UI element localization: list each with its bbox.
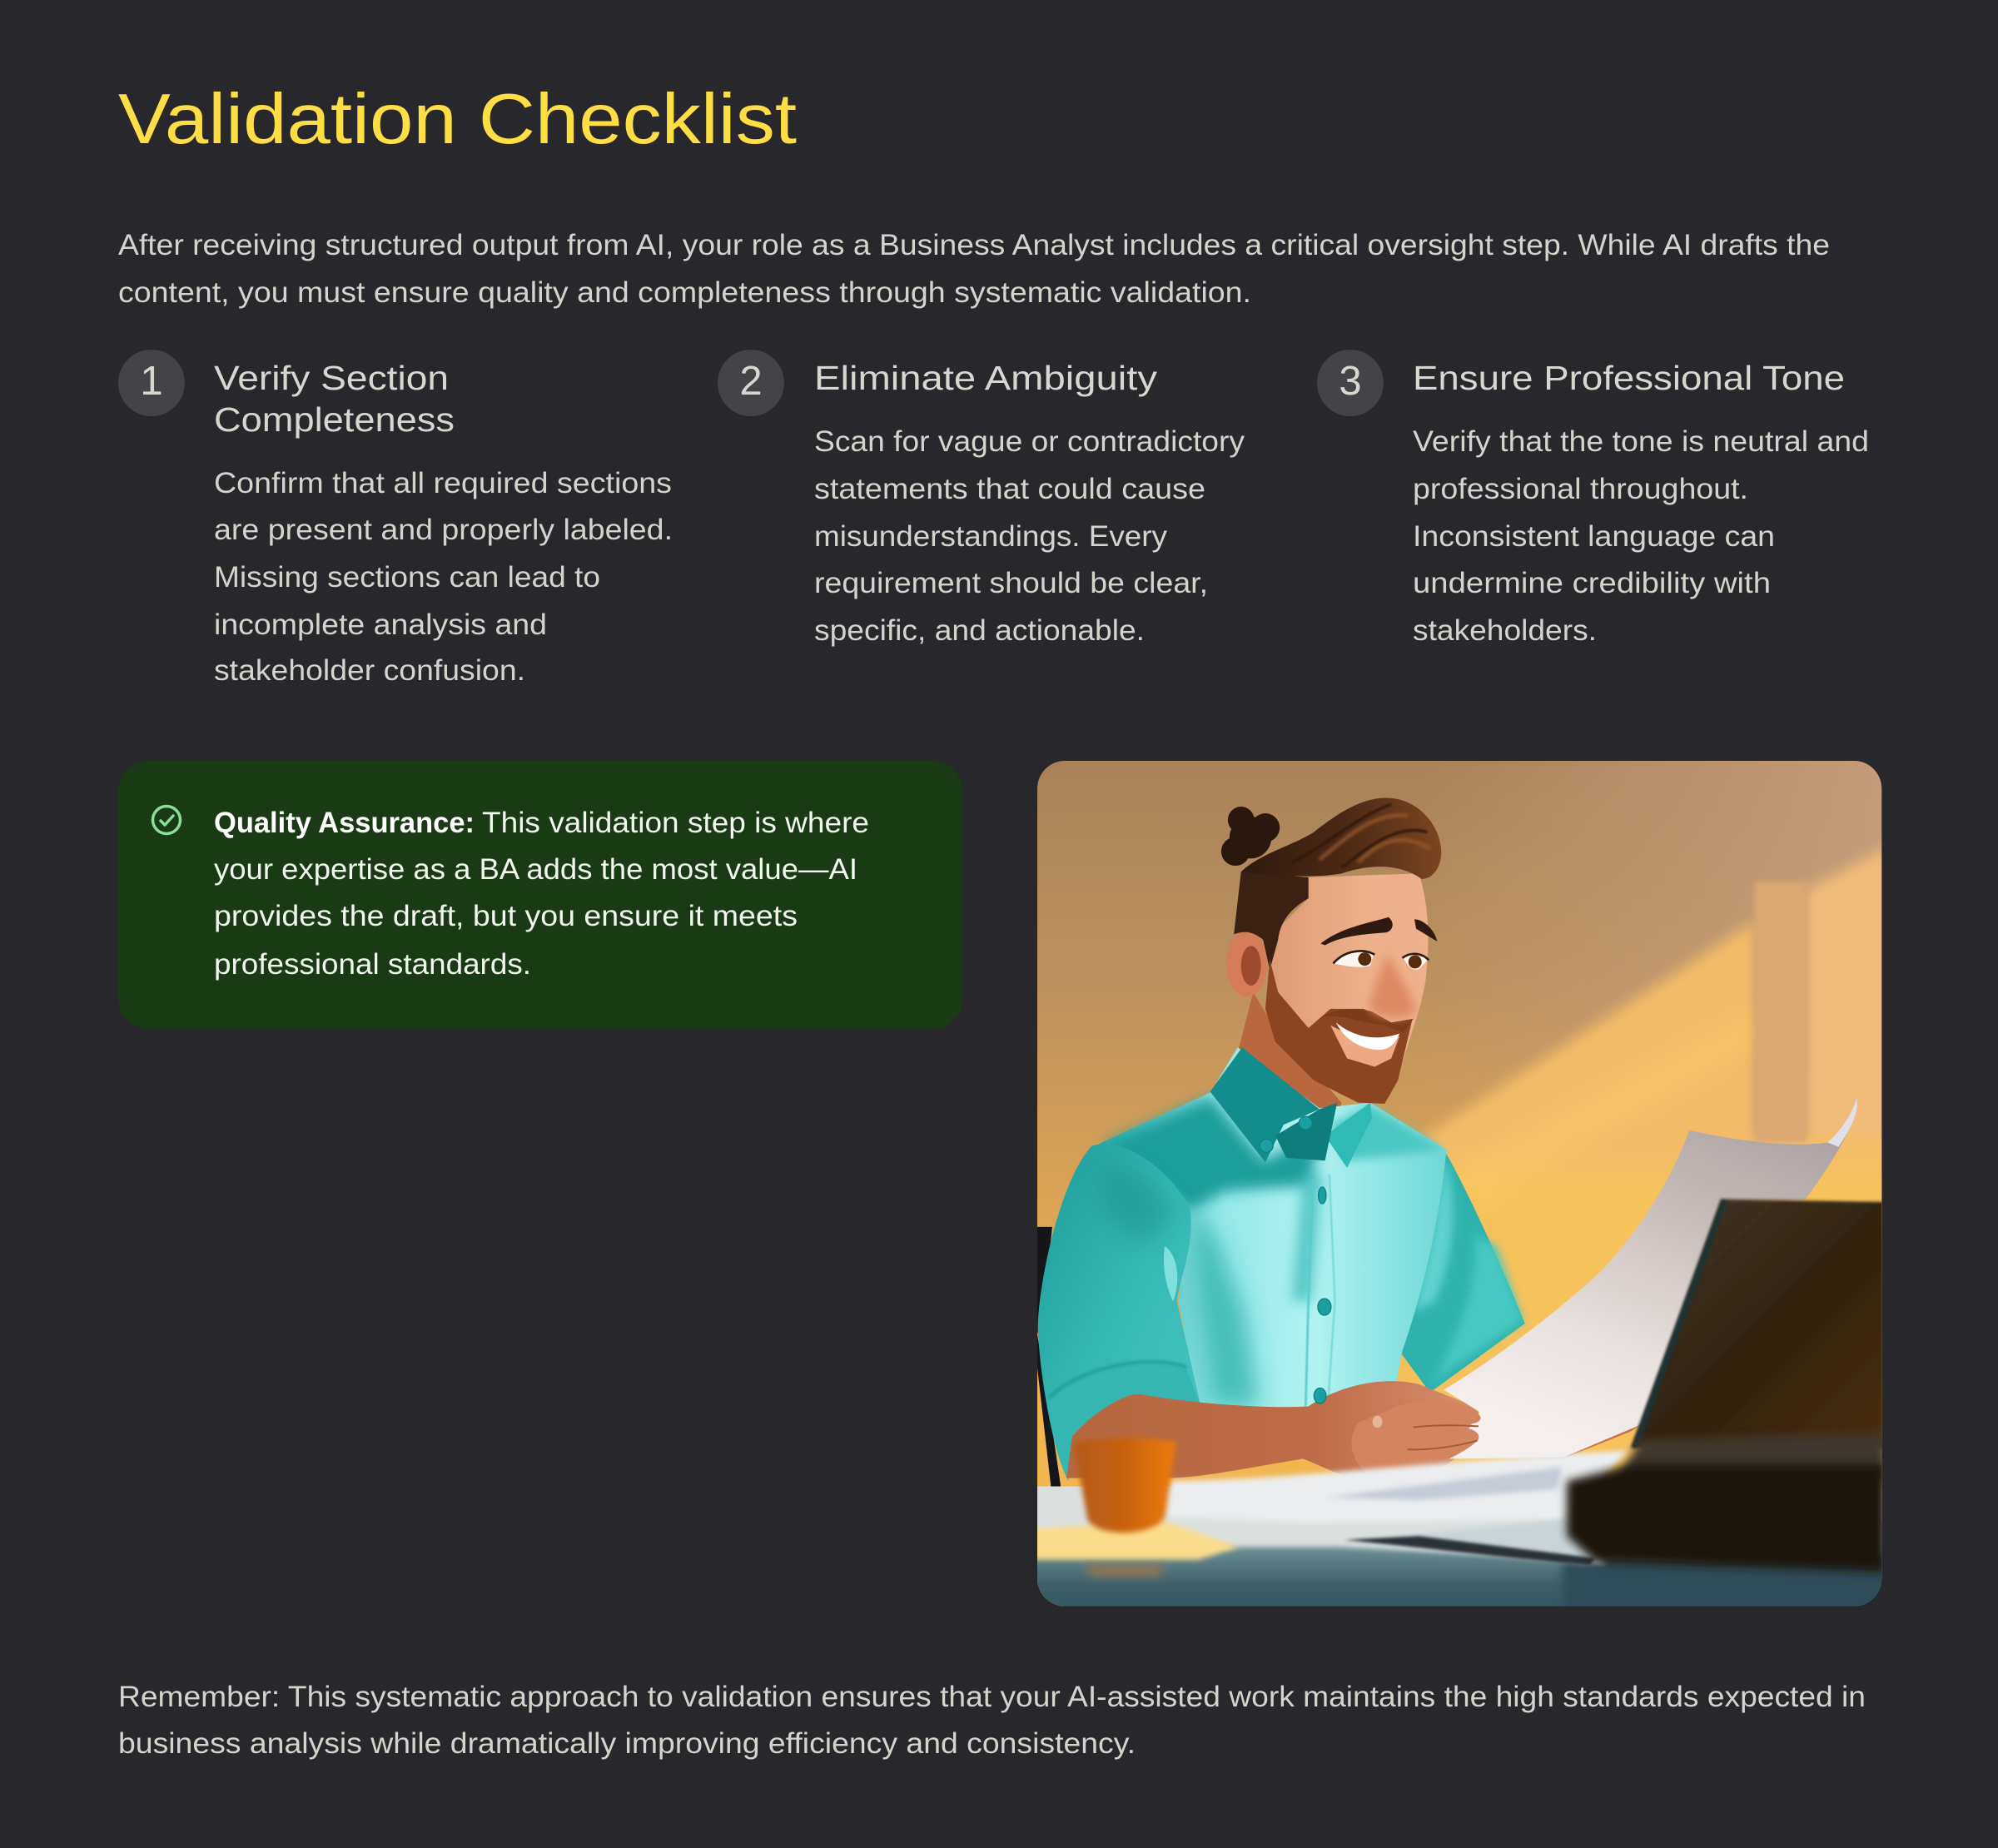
orange cup xyxy=(1074,1438,1175,1533)
text: step 3 body xyxy=(1413,425,1869,647)
left arm and hand xyxy=(1066,1381,1480,1483)
heading: step 1 xyxy=(214,359,455,439)
text: step 1 body: Confirm that all required sections xyxy=(214,467,672,499)
text: quality assurance message xyxy=(214,807,869,981)
text: step 2 body: specific, and actionable. xyxy=(814,614,1145,647)
text: quality assurance message: your expertise as a BA adds the most value—AI xyxy=(214,853,857,886)
shirt left sleeve xyxy=(1038,1145,1200,1481)
shirt shadows xyxy=(1104,1097,1320,1210)
face xyxy=(1267,873,1428,1104)
moustache xyxy=(1322,1009,1414,1033)
eyes xyxy=(1334,951,1374,967)
shaved side of head xyxy=(1234,872,1309,970)
icon: number 3 badge xyxy=(1317,350,1384,416)
sunlight on the wall xyxy=(1423,920,1756,1180)
text: step 1 body: are present and properly labeled. xyxy=(214,514,673,546)
text: quality assurance message: Quality Assurance: xyxy=(214,807,475,839)
icon: number 1 badge xyxy=(118,350,185,416)
icon: number 1 badge: 1 xyxy=(140,359,163,404)
beard xyxy=(1265,959,1412,1104)
footer note xyxy=(118,1681,1866,1760)
intro paragraph: After receiving structured output from AI, your role as a Business Analyst includes a critical oversight step. While AI drafts the xyxy=(118,229,1830,261)
text: step 1 body xyxy=(214,467,673,687)
eyebrows xyxy=(1320,917,1393,946)
nose xyxy=(1369,953,1414,1018)
text: step 2 body: Scan for vague or contradictory xyxy=(814,425,1245,458)
callout: quality assurance xyxy=(118,761,962,1029)
text: step 2 body: requirement should be clear, xyxy=(814,567,1208,599)
title: Validation Checklist xyxy=(118,80,797,159)
shirt right sleeve xyxy=(1399,1150,1525,1393)
shirt torso xyxy=(1099,1047,1447,1409)
text: step 3 body: Inconsistent language can xyxy=(1413,520,1775,553)
text: quality assurance message: provides the draft, but you ensure it meets xyxy=(214,900,798,932)
text: step 3 body: undermine credibility with xyxy=(1413,567,1771,599)
heading: step 1: Completeness xyxy=(214,400,455,439)
panel: step 2 eliminate ambiguity xyxy=(718,350,1245,647)
icon: number 3 badge: 3 xyxy=(1339,359,1362,404)
text: step 2 body: statements that could cause xyxy=(814,473,1205,505)
laptop base xyxy=(1344,1519,1607,1563)
intro paragraph: content, you must ensure quality and completeness through systematic validation. xyxy=(118,276,1251,309)
heading: step 1: Verify Section xyxy=(214,359,449,397)
panel: step 3 ensure professional tone xyxy=(1317,350,1869,647)
yellow note on desk xyxy=(1032,1521,1240,1560)
chair xyxy=(1037,1227,1061,1488)
text: step 2 body xyxy=(814,425,1245,647)
illustration: smiling analyst reading a document at a desk xyxy=(1032,749,1916,1619)
icon: check circle xyxy=(153,806,180,834)
panel: step 1 verify section completeness xyxy=(118,350,673,687)
hand over document xyxy=(1351,1400,1481,1481)
right forearm and hand xyxy=(1542,1425,1640,1458)
ear xyxy=(1226,931,1267,996)
shirt buttons xyxy=(1260,1116,1331,1403)
footer note: Remember: This systematic approach to validation ensures that your AI-assisted work maintains the high standards expected in xyxy=(118,1681,1866,1713)
document xyxy=(1444,1097,1857,1458)
heading: step 2: Eliminate Ambiguity xyxy=(814,359,1158,397)
desk surface xyxy=(1032,1487,1894,1619)
text: step 2 body: misunderstandings. Every xyxy=(814,520,1168,553)
text: step 1 body: incomplete analysis and xyxy=(214,609,547,641)
wall xyxy=(1032,749,1894,1523)
footer note: business analysis while dramatically improving efficiency and consistency. xyxy=(118,1727,1136,1760)
heading: step 3: Ensure Professional Tone xyxy=(1413,359,1845,397)
text: step 3 body: professional throughout. xyxy=(1413,473,1748,505)
text: step 1 body: stakeholder confusion. xyxy=(214,654,525,687)
text: quality assurance message: This validation step is where xyxy=(482,807,869,839)
icon: number 2 badge xyxy=(718,350,784,416)
text: step 3 body: stakeholders. xyxy=(1413,614,1597,647)
hair bun xyxy=(1221,807,1280,866)
smile xyxy=(1336,1022,1399,1050)
collar xyxy=(1210,1047,1320,1162)
text: step 1 body: Missing sections can lead to xyxy=(214,561,600,594)
text: quality assurance message: professional standards. xyxy=(214,948,531,981)
hair xyxy=(1241,797,1441,879)
intro paragraph xyxy=(118,229,1830,309)
laptop lid xyxy=(1632,1200,1886,1448)
neck xyxy=(1239,994,1342,1109)
icon: number 2 badge: 2 xyxy=(739,359,763,404)
text: step 3 body: Verify that the tone is neutral and xyxy=(1413,425,1869,458)
placket xyxy=(1328,1175,1335,1406)
dark box on desk xyxy=(1618,1434,1886,1478)
